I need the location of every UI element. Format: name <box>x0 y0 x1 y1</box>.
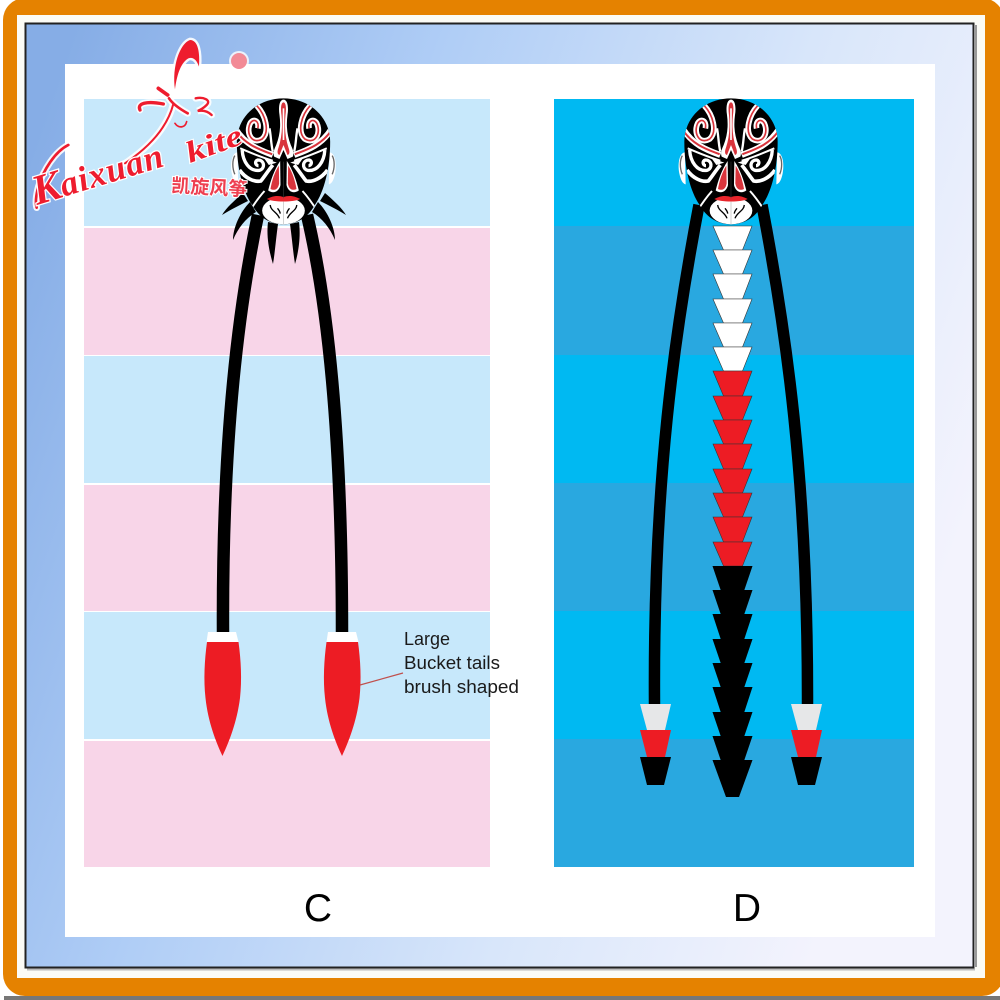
callout: bucket tail note: Bucket tails <box>404 653 500 673</box>
kite D: right side buckets <box>791 704 822 785</box>
kite C: left bucket tail <box>204 632 241 756</box>
white card <box>65 64 935 937</box>
logo: brand text kite: kite <box>181 119 247 170</box>
logo: registered mark <box>229 51 249 71</box>
callout: bucket tail note: brush shaped <box>404 677 519 697</box>
kite D: central red buckets <box>713 371 752 566</box>
kite C: right bucket tail <box>324 632 361 756</box>
kite D: mask head <box>679 98 783 224</box>
callout: leader line <box>360 673 403 685</box>
kite C: mask head <box>231 98 336 224</box>
logo: brand text: Kaixuan <box>26 131 169 215</box>
panel: kite D background bands <box>554 99 914 867</box>
logo: Chinese name: 凯旋风筝 <box>171 174 248 201</box>
kite C: long black tails <box>223 215 342 632</box>
label: C: C <box>304 887 332 930</box>
logo: red brush strokes <box>36 40 212 208</box>
kite D: central black buckets <box>712 566 752 797</box>
kite D: left side buckets <box>640 704 671 785</box>
label: D: D <box>733 887 761 930</box>
callout: bucket tail note: Large <box>404 629 450 649</box>
callout: bucket tail note <box>404 629 519 697</box>
kite C: whiskers <box>222 193 346 264</box>
kite D: central white buckets <box>713 226 752 371</box>
kite D: long black side tails <box>654 205 808 704</box>
logo: Kaixuan kite <box>26 40 249 215</box>
panel: kite C background bands <box>84 99 490 867</box>
